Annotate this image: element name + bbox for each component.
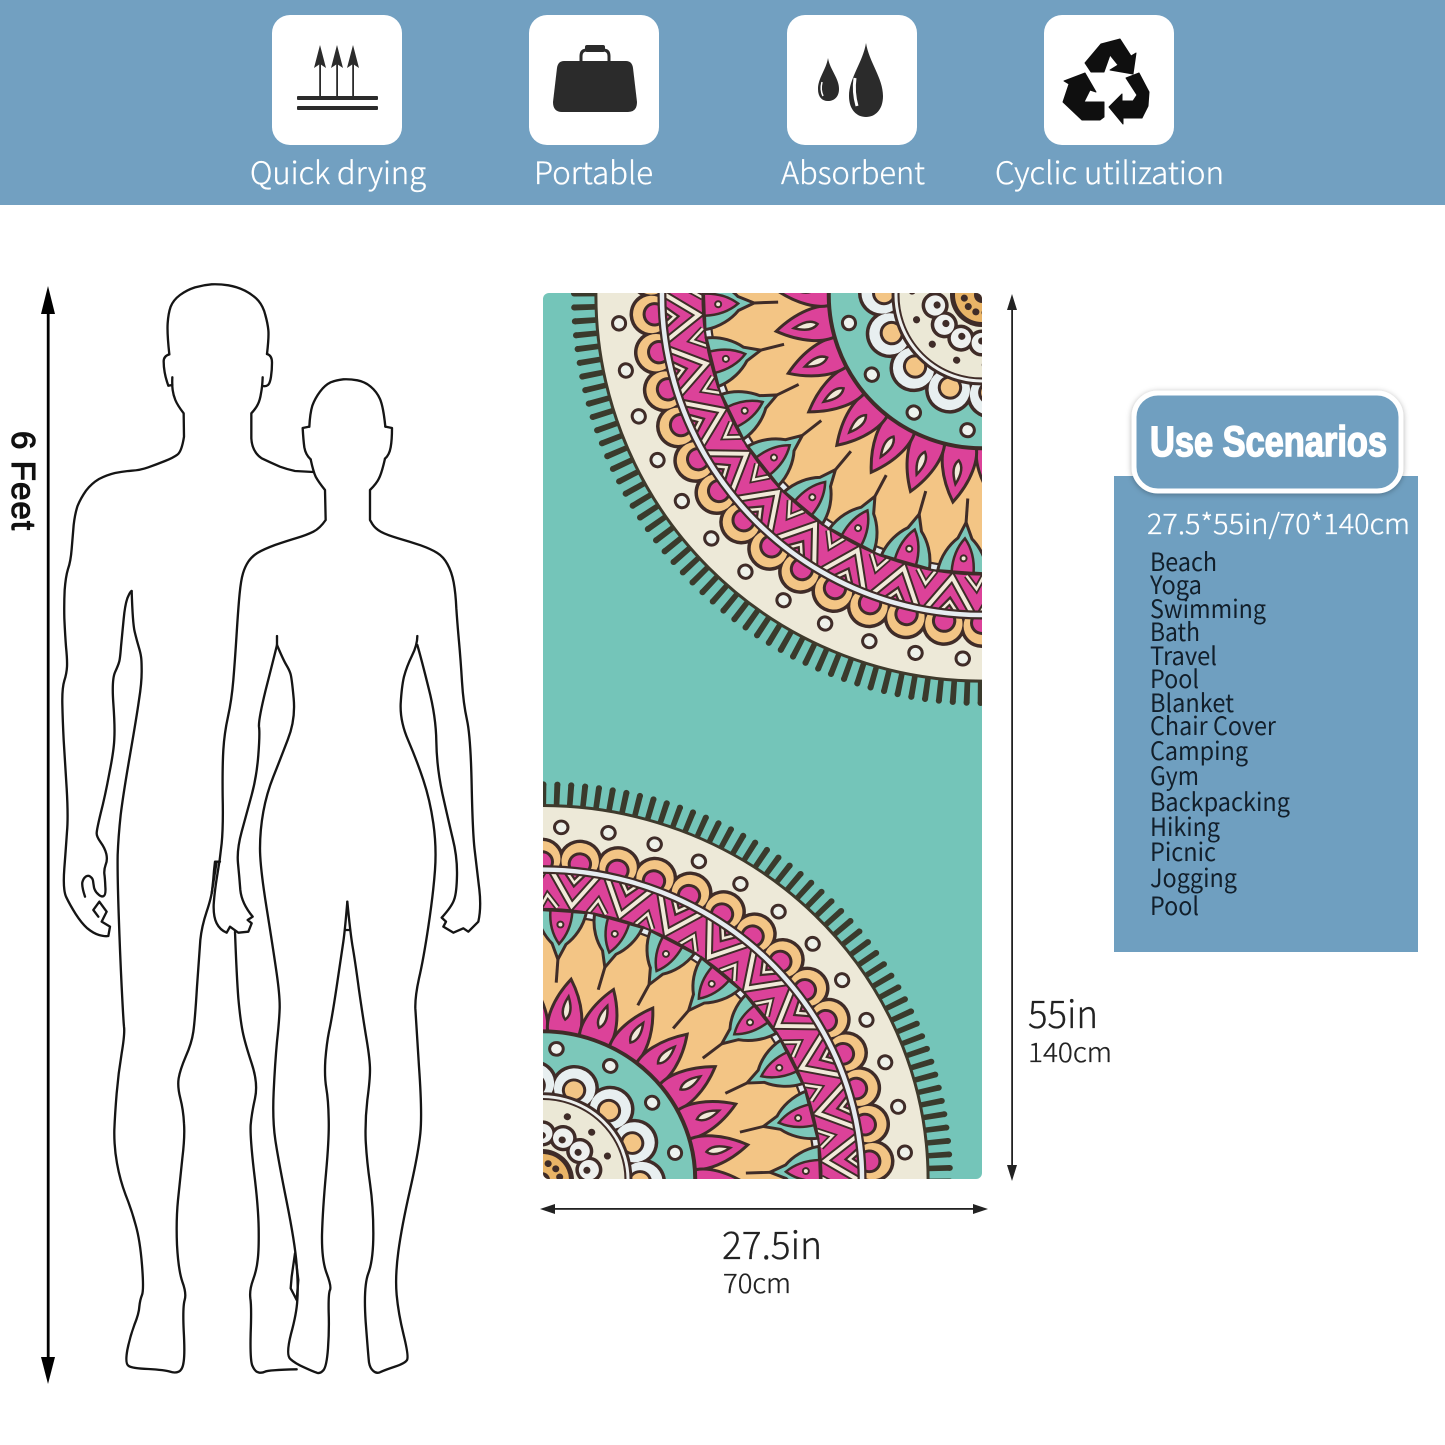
panel heading tab — [1134, 393, 1401, 491]
label: absorbent: Absorbent — [781, 148, 925, 193]
label: towel width: 70cm — [723, 1262, 791, 1301]
human figures outlines — [62, 284, 480, 1373]
towel height arrow — [1007, 294, 1017, 1181]
label: towel width: 27.5in — [722, 1215, 822, 1270]
header band — [0, 0, 1445, 205]
text: scenario list: Gym — [1150, 757, 1199, 793]
man: left ear — [164, 354, 172, 386]
man: hip crease — [212, 862, 217, 893]
woman: head — [309, 379, 385, 427]
text: scenario list: Jogging — [1150, 859, 1237, 895]
label: quick drying: Quick drying — [250, 148, 426, 193]
text: scenario list: Hiking — [1150, 808, 1220, 844]
text: size: 27.5*55in/70*140cm — [1147, 503, 1410, 543]
feature: quick drying — [250, 15, 426, 193]
overlap detail at ankle — [291, 1253, 298, 1300]
text: scenario list: Bath — [1150, 613, 1200, 649]
text: scenario list — [1149, 543, 1290, 923]
icon: rising arrows over fabric layers — [297, 45, 378, 110]
man: right leg — [235, 932, 297, 1373]
panel: use scenarios — [1114, 393, 1418, 952]
text: scenario list: Travel — [1150, 637, 1217, 673]
woman: right ear — [385, 427, 392, 459]
feature: absorbent — [781, 15, 925, 193]
man: right neck and shoulder — [251, 377, 313, 472]
text: scenario list: Beach — [1150, 543, 1217, 579]
text: scenario list: Pool — [1150, 660, 1199, 696]
man: inner arm and fingers — [82, 591, 132, 897]
icon: water drops — [818, 43, 883, 117]
woman: right arm, hand and shoulder — [370, 459, 480, 933]
text: scenario list: Chair Cover — [1150, 707, 1276, 743]
feature: cyclic utilization — [995, 15, 1224, 193]
feature: portable — [529, 15, 659, 193]
man: right ear — [263, 354, 272, 386]
towel with mandala print — [543, 293, 982, 1179]
heading: use scenarios: Use Scenarios — [1150, 418, 1387, 466]
text: scenario list: Pool — [1150, 887, 1199, 923]
woman: right leg and right side — [347, 636, 436, 1373]
man: head — [168, 284, 268, 354]
icon: bag — [553, 45, 637, 112]
label: 6 feet: 6 Feet — [5, 431, 42, 530]
text: scenario list: Swimming — [1150, 590, 1266, 626]
woman: crotch line — [345, 926, 350, 933]
label: towel height — [1028, 984, 1112, 1070]
text: scenario list: Picnic — [1150, 833, 1216, 869]
woman: left ear — [303, 427, 311, 459]
mandala: top right — [571, 293, 982, 706]
mandala: bottom left — [543, 781, 953, 1179]
text: scenario list: Blanket — [1150, 684, 1235, 720]
towel width arrow — [540, 1204, 988, 1214]
text: scenario list: Backpacking — [1150, 783, 1290, 819]
man: torso and left leg — [114, 591, 220, 1372]
text: scenario list: Yoga — [1149, 566, 1202, 602]
icon: recycling arrows — [1063, 39, 1149, 124]
label: towel height: 55in — [1028, 984, 1098, 1039]
label: cyclic utilization: Cyclic utilization — [995, 148, 1224, 193]
label: towel width — [722, 1215, 822, 1301]
label: towel height: 140cm — [1028, 1031, 1112, 1070]
woman: left neck, shoulder, arm and hand — [214, 459, 326, 933]
label: portable: Portable — [534, 148, 653, 193]
text: scenario list: Camping — [1150, 732, 1248, 768]
woman: left side and left leg — [260, 645, 347, 1373]
height arrow: 6 feet — [5, 286, 55, 1384]
man: left neck, shoulder and arm — [62, 377, 184, 936]
